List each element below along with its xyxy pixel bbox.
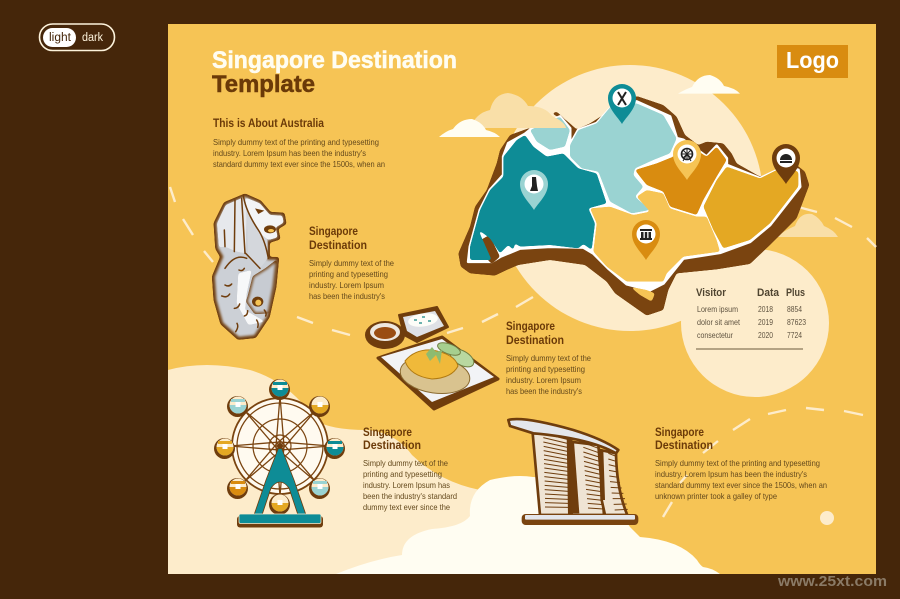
visitor table: 2018: [758, 305, 773, 314]
illustration: chicken rice plate: [365, 307, 498, 409]
logo: [777, 45, 848, 78]
destination text: chicken rice: Singapore: [506, 320, 555, 333]
region: north (light teal): [570, 103, 677, 213]
visitor table: Lorem ipsum: [697, 305, 738, 314]
clouds: over map, top left: [439, 93, 566, 137]
map pin: dome: [772, 144, 800, 184]
map white backing: [468, 102, 800, 290]
visitor table: consectetur: [697, 331, 733, 340]
intro text block: standard dummy text ever since the 1500s, when an: [213, 159, 385, 169]
map of Singapore: [458, 96, 809, 316]
title: [212, 47, 457, 98]
map pin: ferris wheel: [673, 140, 701, 180]
decorative dot: [820, 511, 834, 525]
logo: Logo: [786, 47, 839, 73]
visitor table: dolor sit amet: [697, 318, 741, 327]
map pin: merlion: [520, 170, 548, 210]
destination text: merlion: industry. Lorem Ipsum: [309, 280, 384, 290]
destination text: merlion: [309, 225, 394, 301]
cloud: right behind map: [777, 214, 838, 237]
intro text block: [213, 117, 385, 169]
background shapes: cream circles and hills: [168, 65, 829, 574]
destination text: ferris wheel: industry. Lorem Ipsum has: [363, 480, 451, 490]
notch in the west coast: [481, 235, 500, 264]
illustration: ferris wheel: [214, 379, 345, 528]
visitor table: 7724: [787, 331, 802, 340]
destination text: Marina Bay Sands: industry. Lorem Ipsum has been the industry's: [655, 469, 808, 479]
region: west (teal): [470, 135, 607, 260]
toggle: light / dark: light: [49, 32, 72, 44]
region: south (yellow): [590, 190, 720, 282]
visitor table: Data: [757, 287, 779, 299]
title: Template: [212, 71, 315, 98]
destination text: ferris wheel: dummy text ever since the: [363, 502, 450, 512]
toggle: light / dark: [40, 24, 114, 50]
destination text: ferris wheel: Singapore: [363, 426, 412, 439]
destination text: merlion: Destination: [309, 239, 367, 252]
destination text: merlion: Simply dummy text of the: [309, 258, 394, 268]
destination text: Marina Bay Sands: Simply dummy text of the printing and typesetting: [655, 458, 820, 468]
destination text: chicken rice: Destination: [506, 334, 564, 347]
visitor table: 2019: [758, 318, 773, 327]
destination text: chicken rice: printing and typesetting: [506, 364, 585, 374]
destination text: Marina Bay Sands: [655, 426, 827, 501]
destination text: ferris wheel: been the industry's standard: [363, 491, 457, 501]
cloud: top right: [678, 75, 740, 94]
visitor table: Plus: [786, 287, 805, 299]
region: east (gold): [703, 167, 798, 248]
island: [630, 287, 655, 302]
main panel background: [168, 24, 876, 574]
wheel base: [237, 516, 323, 528]
destination text: ferris wheel: [363, 426, 457, 512]
watermark: www.25xt.com: [777, 574, 887, 590]
region: north-east (orange): [635, 142, 727, 215]
destination text: chicken rice: Simply dummy text of the: [506, 353, 591, 363]
destination text: chicken rice: [506, 320, 591, 396]
destination text: Marina Bay Sands: standard dummy text ever since the 1500s, when an: [655, 480, 827, 490]
destination text: merlion: printing and typesetting: [309, 269, 388, 279]
visitor table: 87623: [787, 318, 806, 327]
destination text: chicken rice: industry. Lorem Ipsum: [506, 375, 581, 385]
destination text: merlion: Singapore: [309, 225, 358, 238]
destination text: Marina Bay Sands: Destination: [655, 439, 713, 452]
intro text block: Simply dummy text of the printing and typesetting: [213, 137, 379, 147]
intro text block: This is About Australia: [213, 117, 324, 130]
visitor table: 8854: [787, 305, 802, 314]
illustration: merlion: [213, 195, 285, 338]
destination text: Marina Bay Sands: Singapore: [655, 426, 704, 439]
region: north-west (light teal): [530, 117, 570, 150]
map pin: restaurant: [608, 84, 636, 124]
visitor table: [696, 287, 806, 349]
dashed route lines: [170, 187, 876, 517]
destination text: ferris wheel: printing and typesetting: [363, 469, 442, 479]
map shadow: [458, 96, 809, 316]
wheel cabins: [214, 379, 345, 515]
destination text: Marina Bay Sands: unknown printer took a galley of type: [655, 491, 777, 501]
map pin: museum: [632, 220, 660, 260]
wheel frame: [254, 444, 306, 515]
toggle: light / dark: dark: [82, 32, 103, 44]
destination text: ferris wheel: Destination: [363, 439, 421, 452]
visitor table: Visitor: [696, 287, 726, 299]
visitor table: 2020: [758, 331, 773, 340]
intro text block: industry. Lorem Ipsum has been the industry's: [213, 148, 367, 158]
destination text: merlion: has been the industry's: [309, 291, 386, 301]
destination text: chicken rice: has been the industry's: [506, 386, 583, 396]
illustration: Marina Bay Sands: [508, 419, 638, 525]
title: Singapore Destination: [212, 47, 457, 74]
destination text: ferris wheel: Simply dummy text of the: [363, 458, 448, 468]
